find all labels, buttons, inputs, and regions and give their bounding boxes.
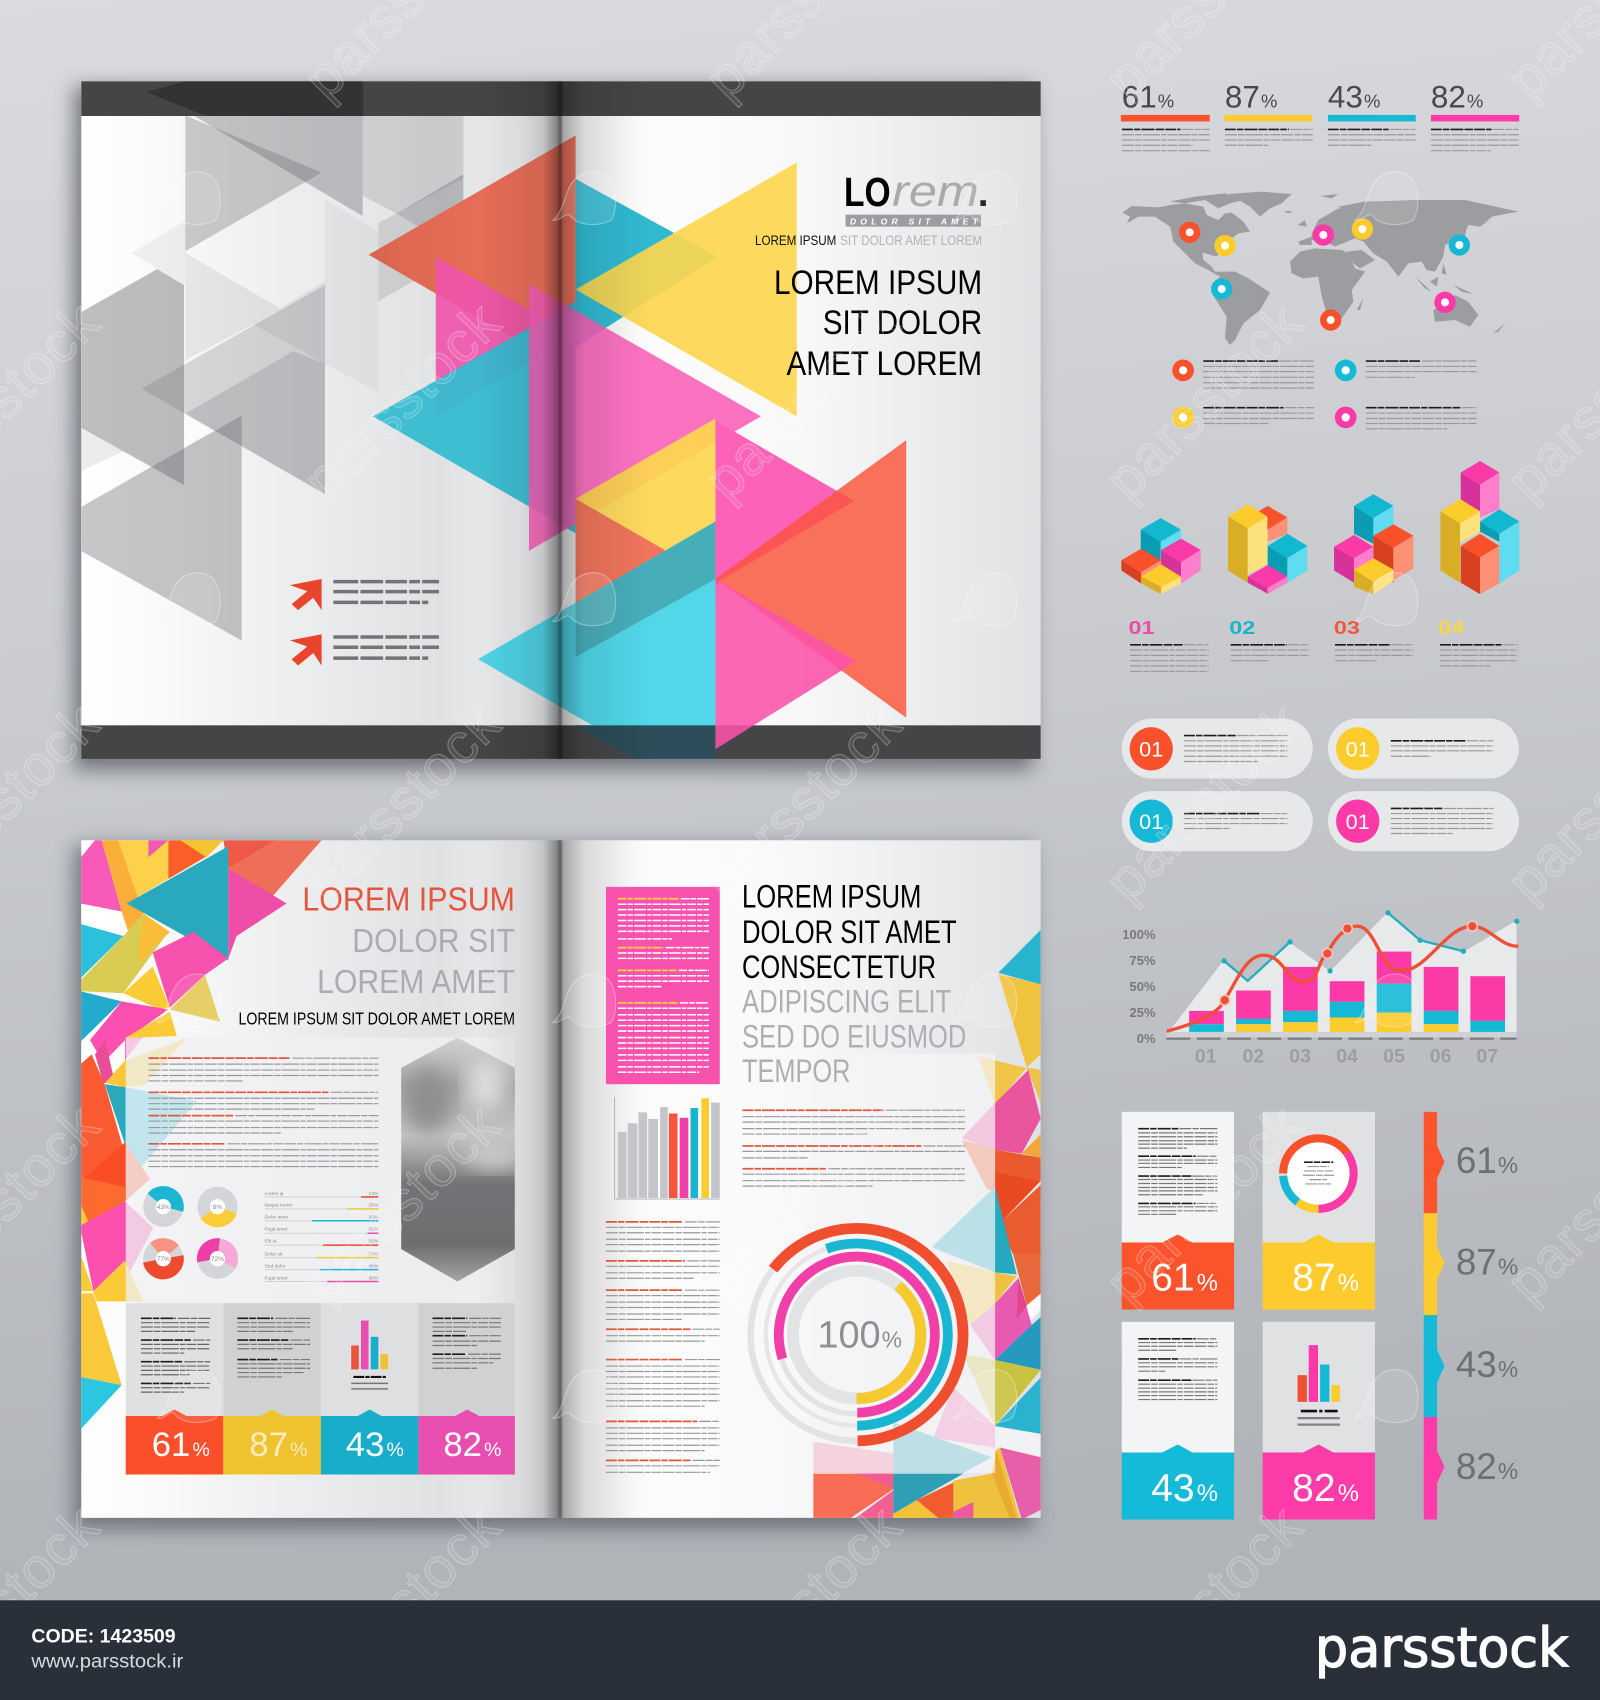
right page title: LOREM IPSUM (742, 878, 921, 914)
top band (81, 81, 1041, 116)
cover title: AMET LOREM (786, 345, 982, 383)
progress list: Dolor amet (264, 1215, 289, 1221)
step labels: 03 (1334, 617, 1360, 638)
bottom right blocks (813, 1474, 973, 1520)
pill cards: 01 (1139, 809, 1163, 834)
panel: percent legend (1121, 79, 1519, 151)
text lines (333, 582, 439, 602)
footer logo: parsstock (1315, 1616, 1569, 1679)
donut (1269, 1124, 1368, 1223)
mini bars (351, 1321, 388, 1389)
column text (606, 1222, 720, 1472)
world map (1122, 192, 1518, 345)
axis labels: 50% (1130, 979, 1156, 994)
progress list: 25% (369, 1227, 379, 1233)
tagline: SIT DOLOR AMET LOREM (840, 232, 982, 248)
subheading: LOREM IPSUM SIT DOLOR AMET LOREM (238, 1009, 515, 1029)
logo: Lorem (844, 168, 989, 227)
x axis labels (1195, 1045, 1498, 1068)
progress list (264, 1191, 379, 1282)
stat cards (1122, 1112, 1375, 1519)
logo: Lorem: LO (844, 169, 891, 215)
isometric chart 04 (1440, 461, 1519, 594)
combo chart (1122, 910, 1519, 1068)
cover title (774, 264, 982, 383)
stats strip: 87% (249, 1426, 307, 1464)
watermarks: parsstock (1093, 1092, 1314, 1314)
spine shadow (477, 81, 650, 759)
progress list: Fugit amet (264, 1227, 288, 1233)
ring chart: 100% (817, 1315, 902, 1357)
panel: percent legend: 61% (1122, 79, 1174, 114)
tagline (755, 232, 982, 248)
panel: percent legend: 43% (1328, 79, 1380, 114)
panel: percent legend: 87% (1225, 79, 1277, 114)
progress list: 55% (369, 1238, 379, 1244)
small pie charts: 43% (157, 1204, 170, 1211)
card 61 (1122, 1112, 1234, 1309)
vertical percent bar: 82% (1456, 1446, 1518, 1487)
ring chart (708, 1185, 1006, 1484)
x axis labels: 05 (1383, 1045, 1405, 1068)
right page title: TEMPOR (742, 1053, 850, 1089)
small pie charts: 72% (211, 1256, 224, 1263)
isometric chart 03 (1334, 494, 1413, 594)
vertical percent bar (1424, 1112, 1518, 1519)
logo: Lorem: . (978, 172, 989, 215)
grey triangle pattern (82, 115, 463, 641)
footer code: CODE: 1423509 (31, 1626, 176, 1648)
isometric chart 01 (1121, 518, 1201, 594)
axis labels: 75% (1130, 953, 1156, 968)
watermarks: parsstock (692, 691, 913, 913)
pill cards: 01 (1139, 737, 1163, 762)
cover title: SIT DOLOR (823, 304, 982, 342)
card 43: 43% (1151, 1467, 1218, 1510)
progress list: 25% (369, 1203, 379, 1209)
stats strip: 43% (346, 1426, 404, 1464)
x axis labels: 06 (1430, 1045, 1452, 1068)
translucent left panel (126, 1038, 515, 1303)
pink text box (606, 887, 720, 1084)
stats strip: 61% (152, 1426, 210, 1464)
card 87: 87% (1292, 1257, 1359, 1300)
watermarks: parsstock (291, 1092, 512, 1314)
x axis labels: 07 (1476, 1045, 1498, 1068)
axis labels: 25% (1130, 1005, 1156, 1020)
logo: Lorem: DOLOR SIT AMET (850, 216, 978, 226)
progress list: Dolor sit (264, 1251, 283, 1257)
watermarks: parsstock (1093, 290, 1314, 512)
progress list: 45% (369, 1263, 379, 1269)
right page title: ADIPISCING ELIT (742, 984, 951, 1020)
footer bar (0, 1600, 1600, 1700)
teal line (1221, 910, 1519, 981)
bottom band (81, 725, 1041, 759)
right body text (743, 1110, 965, 1186)
section heading (302, 882, 515, 1001)
watermarks: parsstock (692, 1092, 913, 1314)
watermarks: parsstock (1093, 691, 1314, 913)
icon: red arrow (290, 634, 322, 665)
panel: percent legend: 82% (1431, 79, 1483, 114)
stats strip (126, 1303, 515, 1474)
right collage (813, 930, 1041, 1520)
red curve (1167, 921, 1518, 1031)
progress list: 38% (369, 1275, 379, 1281)
colour triangles (369, 136, 906, 797)
text lines (333, 637, 439, 658)
translucent right panel (812, 1054, 995, 1473)
isometric chart 02 (1228, 504, 1307, 594)
card 82 (1263, 1322, 1375, 1519)
progress list: 73% (369, 1251, 379, 1257)
watermarks: parsstock (291, 290, 512, 512)
map legend (1172, 360, 1476, 429)
vertical percent bar: 87% (1456, 1241, 1518, 1282)
bars (1189, 952, 1505, 1032)
section heading: DOLOR SIT (352, 923, 515, 960)
spine shadow (477, 840, 650, 1518)
bar chart (615, 1097, 720, 1199)
right page title (742, 878, 966, 1089)
progress list: Sed dolor (264, 1263, 286, 1269)
map pins (1179, 218, 1470, 331)
step labels (1128, 617, 1465, 638)
x axis labels: 04 (1336, 1045, 1358, 1068)
stats strip: 82% (443, 1426, 501, 1464)
step labels: 02 (1229, 617, 1255, 638)
brochure inner spread (74, 840, 1041, 1529)
section heading: LOREM IPSUM (302, 882, 515, 919)
brochure cover (74, 81, 1041, 797)
right page title: DOLOR SIT AMET (742, 914, 957, 950)
small pie charts (143, 1186, 238, 1279)
progress list: 33% (369, 1215, 379, 1221)
section heading: LOREM AMET (317, 964, 515, 1001)
progress list: 13% (369, 1191, 379, 1197)
band shadow triangle (146, 81, 363, 116)
left body text (149, 1058, 378, 1167)
area (1169, 914, 1517, 1032)
progress list: Lorem ip (264, 1191, 284, 1197)
card 43 (1122, 1322, 1234, 1519)
hexagon photo (401, 1038, 524, 1282)
axis labels: 0% (1137, 1031, 1156, 1046)
pill cards (1122, 718, 1519, 851)
right page title: SED DO EIUSMOD (742, 1018, 966, 1054)
progress list: Elit et (264, 1238, 277, 1244)
vertical percent bar: 43% (1456, 1344, 1518, 1385)
step labels: 01 (1128, 617, 1154, 638)
card 87 (1263, 1112, 1375, 1309)
footer url: www.parsstock.ir (30, 1650, 184, 1672)
axis labels (1122, 927, 1156, 1046)
tagline: LOREM IPSUM (755, 232, 836, 248)
watermarks: parsstock (291, 691, 512, 913)
x axis labels: 03 (1289, 1045, 1311, 1068)
icon: red arrow (290, 579, 322, 610)
pill cards: 01 (1346, 809, 1370, 834)
x axis labels: 02 (1242, 1045, 1264, 1068)
left collage (80, 840, 322, 1430)
right page title: CONSECTETUR (742, 949, 936, 985)
small pie charts: 8% (213, 1204, 222, 1211)
progress list: Neque lorem (264, 1203, 292, 1209)
card 82: 82% (1292, 1467, 1359, 1510)
step text (1130, 645, 1518, 671)
small pie charts: 77% (157, 1256, 170, 1263)
watermarks: parsstock (692, 290, 913, 512)
axis labels: 100% (1122, 927, 1156, 942)
x axis labels: 01 (1195, 1045, 1217, 1068)
vertical percent bar: 61% (1456, 1140, 1518, 1181)
progress list: Fugit amet (264, 1275, 288, 1281)
pill cards: 01 (1346, 737, 1370, 762)
logo: Lorem: rem (892, 168, 979, 216)
cover title: LOREM IPSUM (774, 264, 982, 302)
card 61: 61% (1151, 1257, 1218, 1300)
step labels: 04 (1438, 617, 1465, 638)
